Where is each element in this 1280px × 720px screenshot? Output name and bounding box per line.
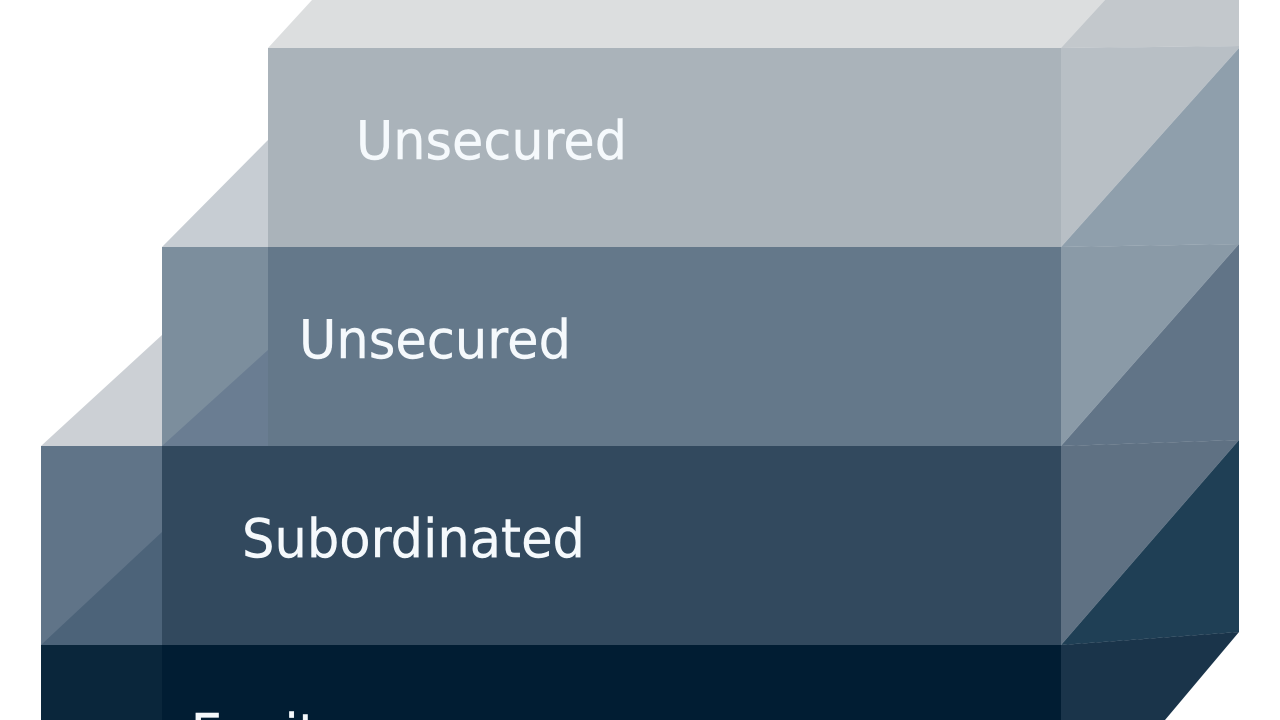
layer: top unsecured block	[268, 0, 1239, 247]
layer: equity block	[41, 632, 1239, 720]
label: Unsecured (second): Unsecured	[299, 308, 571, 371]
label: Unsecured (top): Unsecured	[356, 109, 627, 172]
layer: subordinated block	[41, 335, 1239, 645]
label: Subordinated: Subordinated	[242, 507, 585, 570]
layer: second unsecured block	[162, 140, 1239, 446]
